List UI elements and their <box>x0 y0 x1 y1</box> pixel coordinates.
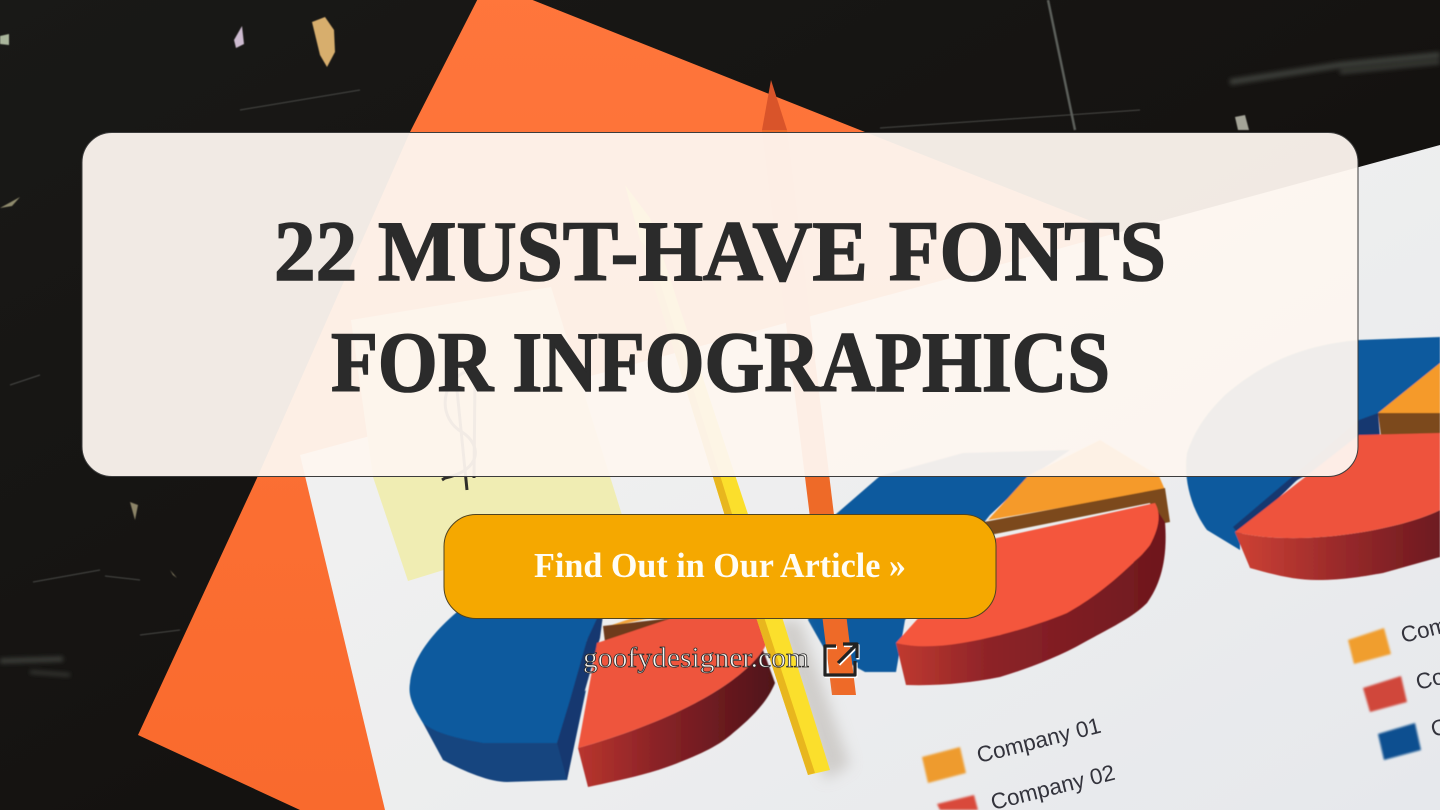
right chart legend <box>1348 628 1421 760</box>
yellow pencil darker edge <box>640 240 815 775</box>
title line 2: FOR INFOGRAPHICS <box>331 314 1110 410</box>
white chart paper <box>300 145 1440 810</box>
website address: goofydesigner.com <box>583 643 809 674</box>
middle pie orange slice <box>988 440 1165 520</box>
title panel <box>82 132 1358 476</box>
middle pie blue <box>808 450 1070 672</box>
right pie navy edge <box>1233 413 1380 536</box>
button label: Find Out in Our Article » <box>534 546 906 585</box>
legend swatch orange <box>922 747 966 783</box>
left pie blue top <box>410 612 605 743</box>
left pie red top <box>578 612 767 748</box>
legend swatch red <box>937 795 978 810</box>
legend swatch red <box>1363 676 1407 712</box>
left legend labels <box>974 713 1117 810</box>
yellow pencil body <box>625 185 830 775</box>
left legend labels: Company 01 <box>974 713 1103 768</box>
icon: external link <box>825 644 858 676</box>
orange pencil tip <box>762 80 787 130</box>
right pie orange slice <box>1378 363 1440 413</box>
middle pie chart <box>808 440 1170 685</box>
legend swatch blue <box>1378 723 1421 760</box>
left chart legend <box>922 747 978 810</box>
title line 1: 22 MUST-HAVE FONTS <box>274 203 1166 299</box>
left pie orange slice <box>603 612 680 628</box>
right pie brown edge <box>1378 413 1440 437</box>
button background <box>444 514 996 618</box>
worn streaks on desk <box>0 55 1440 675</box>
pen dollar sketch on note <box>442 370 475 490</box>
yellow sticky note <box>351 287 622 581</box>
right pie blue <box>1186 337 1440 550</box>
left pie blue side <box>410 683 586 782</box>
middle pie brown edge <box>984 488 1170 535</box>
orange pencil body <box>762 130 856 695</box>
panel background <box>82 132 1358 476</box>
middle pie red side <box>896 510 1166 685</box>
left pie blue inner wedge <box>557 612 603 780</box>
right pie red side <box>1235 510 1440 580</box>
left pie chart <box>410 612 775 787</box>
right legend labels <box>1398 600 1440 742</box>
legend swatch orange <box>1348 628 1391 664</box>
orange paper <box>138 0 1185 810</box>
call to action button <box>444 514 996 618</box>
right pie red top <box>1235 433 1440 538</box>
left pie brown edge <box>603 618 676 642</box>
yellow pencil shadow <box>775 620 850 780</box>
yellow pencil <box>625 185 830 775</box>
middle pie red top <box>896 503 1159 646</box>
orange pencil <box>762 80 856 695</box>
right pie chart <box>1186 337 1440 580</box>
website link <box>583 643 858 676</box>
left pie red side <box>578 650 775 787</box>
vertical desk scratch <box>1048 0 1075 130</box>
desk scratches <box>0 0 1249 635</box>
